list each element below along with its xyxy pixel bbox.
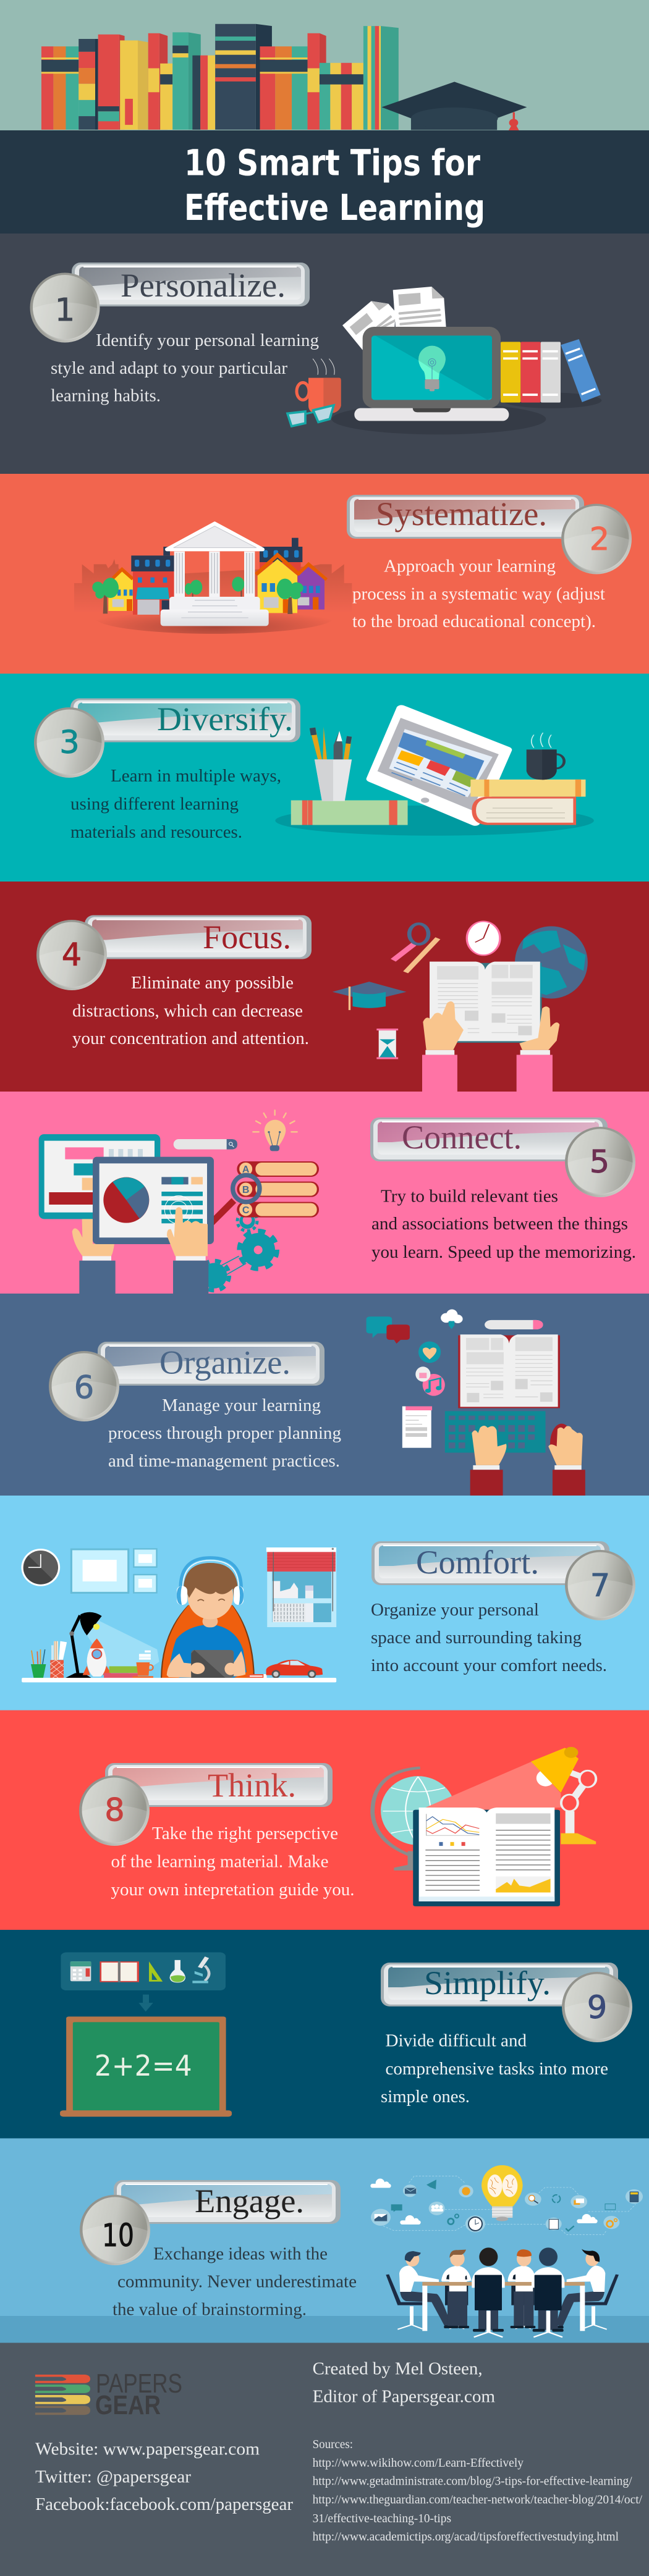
books on shelf [41, 24, 399, 130]
icon: graduation cap [381, 82, 527, 134]
banner: simplify: Simplify. [424, 1964, 551, 2001]
tip 4 text: your concentration and attention. [72, 1029, 309, 1048]
tip 1 text: style and adapt to your particular [51, 358, 287, 378]
tip 2 text: Approach your learning [384, 556, 556, 576]
title band [0, 130, 649, 234]
title line two: Effective Learning [184, 187, 485, 229]
panel: tip 9 simplify [0, 1930, 649, 2139]
illustration: idea bulb and icons [370, 2165, 643, 2234]
logo: papers gear: PAPERS [96, 2368, 182, 2399]
sources list: http://www.academictips.org/acad/tipsforeffectivestudying.html [313, 2530, 619, 2544]
panel: tip 10 engage [0, 2139, 649, 2342]
banner: simplify [381, 1963, 618, 2006]
tip 1 text: learning habits. [51, 385, 161, 405]
number coin 9: 9 [587, 1990, 607, 2026]
tip 8 text [111, 1824, 355, 1900]
number coin 7 [565, 1550, 635, 1620]
number coin 9 [562, 1972, 632, 2042]
banner: diversify [70, 698, 300, 743]
tip 5 text: Try to build relevant ties [381, 1187, 558, 1206]
banner: think: Think. [208, 1767, 296, 1804]
panel: tip 4 focus [0, 882, 649, 1092]
tip 3 text: using different learning [70, 794, 239, 814]
banner: personalize [72, 263, 310, 306]
number coin 10: 10 [102, 2218, 134, 2254]
panel: tip 5 connect [0, 1092, 649, 1294]
contact details: Website: www.papersgear.com [35, 2440, 260, 2459]
tip 7 text: Organize your personal [371, 1600, 539, 1620]
tip 3 text: Learn in multiple ways, [111, 766, 281, 786]
number coin 7: 7 [590, 1568, 610, 1604]
sources list [313, 2438, 642, 2544]
banner: engage: Engage. [195, 2182, 304, 2220]
contact details: Facebook:facebook.com/papersgear [35, 2495, 294, 2514]
number coin 8 [79, 1775, 150, 1846]
illustration: school icons and chalkboard [60, 1952, 232, 2116]
tip 3 text [70, 766, 281, 842]
illustration: tablets, hands and gears: B [242, 1185, 249, 1195]
illustration: tablets, hands and gears [39, 1110, 319, 1294]
illustration: hands holding open book [333, 922, 588, 1092]
number coin 4: 4 [62, 937, 82, 974]
number coin 3 [34, 707, 104, 778]
sources list: Sources: [313, 2438, 353, 2451]
tip 8 text: of the learning material. Make [111, 1852, 329, 1872]
illustration: tablets, hands and gears: C [242, 1205, 250, 1216]
illustration: laptop, books and mug [287, 287, 601, 434]
number coin 8: 8 [104, 1793, 125, 1829]
tip 7 text: into account your comfort needs. [371, 1656, 607, 1675]
illustration: tablet, books and pencils [275, 708, 594, 836]
tip 6 text: process through proper planning [108, 1423, 341, 1443]
banner: connect [370, 1118, 608, 1161]
panel: header illustration with books [0, 0, 649, 134]
number coin 10 [80, 2195, 150, 2265]
number coin 1 [30, 273, 100, 342]
panel: tip 6 organize [0, 1294, 649, 1496]
tip 2 text: to the broad educational concept). [352, 612, 596, 631]
illustration: school icons and chalkboard: 2+2=4 [95, 2049, 192, 2082]
illustration: book, keyboard and hands [367, 1309, 585, 1496]
tip 10 text [112, 2244, 357, 2320]
number coin 2 [561, 504, 632, 575]
number coin 6: 6 [74, 1370, 94, 1406]
title line one: 10 Smart Tips for [184, 142, 480, 184]
tip 3 text: materials and resources. [70, 822, 242, 842]
illustration: tablets, hands and gears: A [242, 1164, 250, 1175]
tip 9 text: simple ones. [381, 2087, 470, 2107]
tip 5 text: and associations between the things [371, 1214, 628, 1234]
tip 10 text: the value of brainstorming. [112, 2300, 307, 2320]
tip 5 text [371, 1187, 636, 1262]
number coin 5: 5 [590, 1144, 609, 1181]
banner: personalize: Personalize. [121, 267, 286, 304]
tip 4 text: Eliminate any possible [131, 973, 294, 993]
banner: organize [98, 1342, 324, 1386]
illustration: temple and town [74, 523, 352, 634]
tip 2 text: process in a systematic way (adjust [352, 584, 605, 604]
sources list: 31/effective-teaching-10-tips [313, 2512, 451, 2525]
banner: comfort: Comfort. [416, 1544, 539, 1581]
illustration: globe, lamp and open book [373, 1747, 596, 1906]
logo: papers gear [35, 2368, 182, 2420]
tip 4 text: distractions, which can decrease [72, 1001, 303, 1021]
tip 8 text: Take the right persepctive [152, 1824, 338, 1843]
number coin 3: 3 [59, 725, 80, 761]
banner: engage [114, 2180, 341, 2224]
logo: papers gear: GEAR [95, 2390, 161, 2420]
banner: focus [85, 915, 312, 959]
tip 5 text: you learn. Speed up the memorizing. [371, 1242, 636, 1262]
sources list: http://www.getadministrate.com/blog/3-tips-for-effective-learning/ [313, 2475, 632, 2488]
contact details: Twitter: @papersgear [35, 2467, 192, 2487]
number coin 5 [565, 1127, 635, 1197]
number coin 2: 2 [590, 521, 609, 558]
sources list: http://www.theguardian.com/teacher-network/teacher-blog/2014/oct/ [313, 2493, 642, 2507]
credit text [313, 2360, 495, 2407]
illustration: team around table [386, 2247, 619, 2337]
tip 9 text: comprehensive tasks into more [386, 2059, 608, 2079]
tip 7 text: space and surrounding taking [371, 1628, 582, 1648]
number coin 6 [49, 1351, 119, 1421]
credit text: Editor of Papersgear.com [313, 2387, 495, 2407]
tip 6 text [108, 1395, 341, 1471]
banner: comfort [371, 1541, 609, 1585]
tip 6 text: and time-management practices. [108, 1451, 340, 1471]
banner: connect: Connect. [402, 1119, 522, 1156]
banner: diversify: Diversify. [157, 701, 293, 738]
banner: focus: Focus. [203, 919, 291, 956]
panel: tip 3 diversify [0, 673, 649, 882]
banner: systematize [347, 495, 584, 539]
banner: think [105, 1763, 333, 1807]
banner: organize: Organize. [159, 1344, 291, 1381]
illustration: student at desk [21, 1547, 336, 1682]
sources list: http://www.wikihow.com/Learn-Effectively [313, 2456, 524, 2470]
panel: tip 2 systematize [0, 474, 649, 673]
credit text: Created by Mel Osteen, [313, 2360, 483, 2378]
tip 1 text: Identify your personal learning [96, 330, 319, 350]
number coin 1: 1 [55, 292, 75, 329]
tip 2 text [352, 556, 605, 631]
panel: tip 1 personalize [0, 234, 649, 474]
tip 6 text: Manage your learning [162, 1395, 321, 1415]
banner: systematize: Systematize. [376, 495, 547, 532]
tip 10 text: community. Never underestimate [117, 2272, 357, 2292]
panel: tip 7 comfort [0, 1496, 649, 1710]
tip 8 text: your own intepretation guide you. [111, 1880, 355, 1900]
tip 1 text [51, 330, 319, 405]
contact details [35, 2440, 294, 2514]
panel: tip 8 think [0, 1710, 649, 1930]
tip 10 text: Exchange ideas with the [153, 2244, 328, 2264]
tip 9 text [381, 2031, 608, 2107]
tip 9 text: Divide difficult and [386, 2031, 527, 2051]
number coin 4 [36, 920, 107, 990]
tip 4 text [72, 973, 309, 1048]
panel: footer [0, 2342, 649, 2576]
sky background [0, 0, 649, 130]
tip 7 text [371, 1600, 607, 1675]
